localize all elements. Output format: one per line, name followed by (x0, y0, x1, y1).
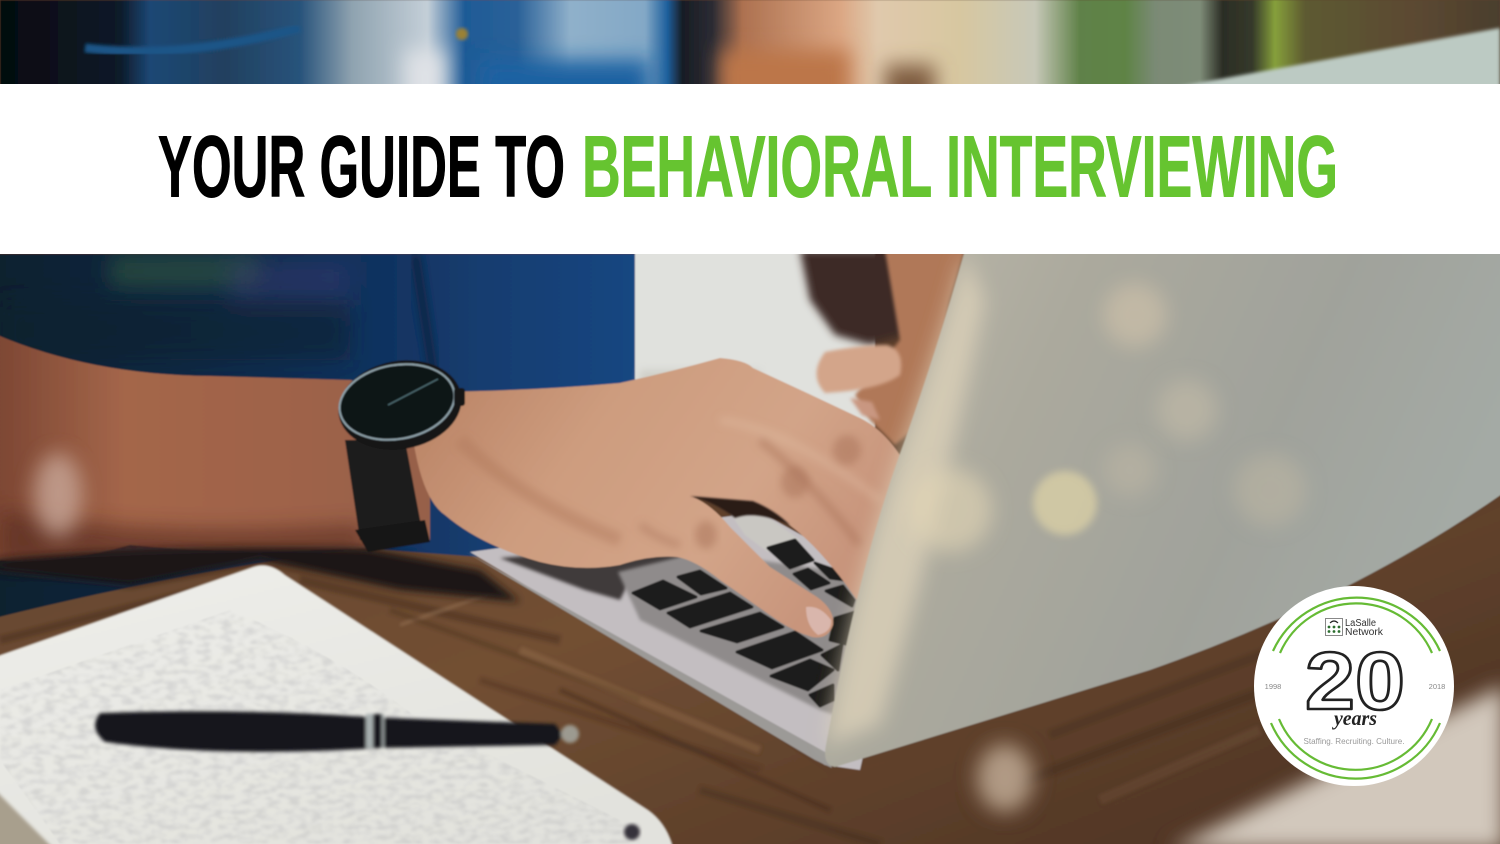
blurred top strip of the photo (0, 0, 1500, 84)
shadow gap between the fingers (690, 496, 790, 525)
logo wordmark: Network (1345, 627, 1384, 638)
logo icon (1326, 618, 1342, 636)
current year: 2018 (1429, 682, 1445, 691)
wristwatch (338, 360, 466, 552)
forearm (0, 334, 430, 561)
wooden table (0, 505, 1500, 844)
title band (0, 84, 1500, 254)
shirt and blurred background below the band (0, 250, 875, 624)
founding year: 1998 (1265, 682, 1281, 691)
green ring arcs (1271, 598, 1440, 779)
title (158, 118, 1338, 216)
notebook (0, 565, 672, 844)
number 20: 20 (1305, 636, 1405, 727)
pen (95, 711, 579, 752)
laptop lid (825, 250, 1500, 767)
typing hand (408, 358, 905, 638)
tagline: Staffing. Recruiting. Culture. (1304, 736, 1404, 746)
years: years (1331, 706, 1377, 730)
handwriting texture (0, 610, 640, 844)
laptop base and keyboard (466, 512, 900, 770)
keyboard keys (633, 540, 855, 706)
badge: LaSalle Network 20 years (1254, 586, 1454, 786)
logo wordmark: LaSalle (1345, 618, 1376, 629)
far hand behind the laptop (800, 250, 965, 445)
logo wordmark (1345, 618, 1384, 638)
title: YOUR GUIDE TO (158, 118, 565, 216)
shadow under the forearm (0, 548, 520, 602)
